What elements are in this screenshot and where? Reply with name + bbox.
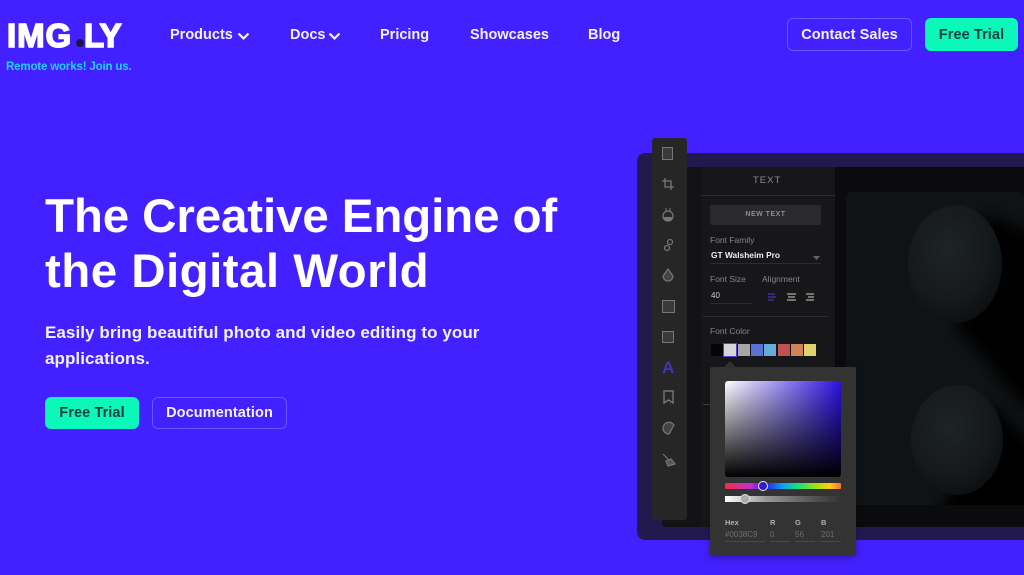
value: hex: #0038C9 (725, 530, 757, 539)
toolbar icon: page (662, 147, 673, 160)
mockup frame (637, 153, 1024, 540)
hero subtext: applications. (45, 349, 150, 368)
value: g: 56 (795, 530, 804, 539)
logo: LY (84, 17, 120, 54)
opacity slider (725, 496, 841, 502)
toolbar icon: frame (662, 300, 675, 313)
hero heading: the Digital World (45, 245, 429, 298)
button: free trial nav: Free Trial (939, 27, 1004, 43)
hero heading: The Creative Engine of (45, 190, 557, 243)
toolbar icon: circles (664, 238, 674, 252)
value: b: 201 (821, 530, 834, 539)
icon: chevron products (238, 32, 250, 40)
button: contact sales (787, 18, 912, 51)
alignment icons (768, 293, 814, 301)
color gradient field (725, 381, 841, 477)
hero heading (45, 190, 558, 298)
button: free trial nav (925, 18, 1018, 51)
color picker popup (710, 367, 856, 556)
editor mockup (637, 138, 1024, 540)
toolbar icon: bookmark (663, 390, 674, 404)
nav: pricing: Pricing (380, 27, 429, 43)
new text button: NEW TEXT (745, 211, 786, 218)
toolbar icon: crop (662, 178, 674, 190)
toolbar panel (652, 138, 687, 520)
hue knob (758, 481, 768, 491)
notice link: Remote works! Join us. (6, 61, 132, 73)
toolbar icon: drop (662, 268, 674, 282)
button: documentation: Documentation (166, 405, 273, 421)
toolbar icon: text: A (662, 358, 674, 377)
label: font family: Font Family (710, 235, 754, 245)
nav: products: Products (170, 27, 233, 43)
new text button (710, 205, 821, 225)
label: b: B (821, 518, 826, 527)
logo: IMG (7, 17, 72, 54)
icon: chevron docs (328, 32, 340, 40)
font family value: GT Walsheim Pro (711, 250, 780, 260)
label: r: R (770, 518, 775, 527)
nav: showcases: Showcases (470, 27, 549, 43)
icon: dropdown caret (813, 256, 820, 260)
toolbar icon: layer (662, 331, 674, 343)
color picker notch (724, 361, 736, 367)
logo (7, 17, 122, 54)
label: hex: Hex (725, 518, 739, 527)
button: documentation (152, 397, 287, 429)
panel title: TEXT (753, 175, 781, 186)
opacity knob (740, 494, 750, 504)
label: alignment: Alignment (762, 274, 800, 284)
color swatches (711, 343, 816, 357)
button: contact sales: Contact Sales (801, 27, 898, 43)
hero subtext (45, 323, 480, 368)
hero subtext: Easily bring beautiful photo and video editing to your (45, 323, 479, 342)
canvas area (662, 167, 1024, 527)
toolbar icon: brush (662, 454, 676, 467)
toolbar icon: sticker (662, 422, 675, 435)
label: font color: Font Color (710, 326, 750, 336)
label: font size: Font Size (710, 274, 746, 284)
nav: blog: Blog (588, 27, 620, 43)
font size value: 40 (711, 291, 720, 300)
nav: docs: Docs (290, 27, 325, 43)
value: r: 0 (770, 530, 774, 539)
label: g: G (795, 518, 801, 527)
toolbar icon: flask (662, 208, 674, 222)
hue slider (725, 483, 841, 489)
button: free trial hero (45, 397, 139, 429)
button: free trial hero: Free Trial (59, 405, 125, 421)
